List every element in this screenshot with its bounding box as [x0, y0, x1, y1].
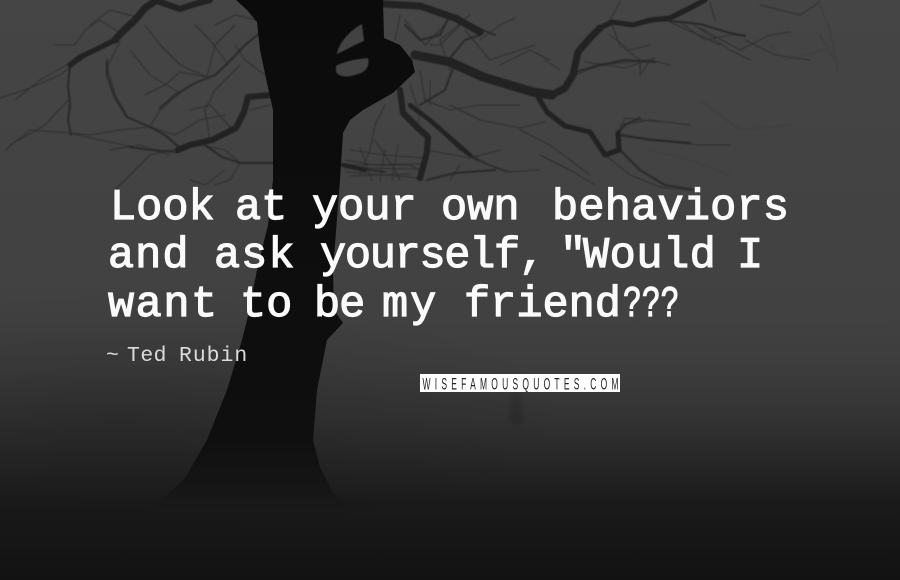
quote text: and — [108, 232, 189, 281]
author attribution: Rubin — [179, 344, 248, 368]
quote text: friend — [464, 281, 621, 330]
quote text: want — [108, 281, 219, 330]
quote text: behaviors — [552, 184, 789, 233]
author attribution: Ted — [127, 344, 167, 368]
quote text: ??? — [623, 280, 679, 330]
quote text: ask — [214, 232, 295, 281]
quote text: own — [441, 184, 519, 233]
quote text: I — [737, 232, 763, 281]
quote text — [108, 184, 789, 330]
thin twigs — [0, 2, 820, 190]
trunk holes — [336, 24, 369, 76]
quote text: be — [314, 281, 364, 330]
quote text: Look — [110, 184, 215, 233]
faint far twigs — [650, 5, 838, 175]
quote text: " — [560, 232, 586, 281]
author attribution — [106, 344, 248, 368]
thick branches — [70, 0, 705, 178]
mid branches — [68, 7, 745, 190]
quote text: Would — [583, 232, 716, 281]
quote text: yourself, — [320, 232, 544, 281]
tree trunk — [150, 0, 415, 512]
quote text: to — [240, 281, 292, 330]
distant figure in fog — [508, 392, 525, 426]
quote text: at — [235, 184, 287, 233]
quote text: my — [382, 281, 438, 330]
quote text: your — [312, 184, 417, 233]
author attribution: ~ — [106, 344, 119, 368]
